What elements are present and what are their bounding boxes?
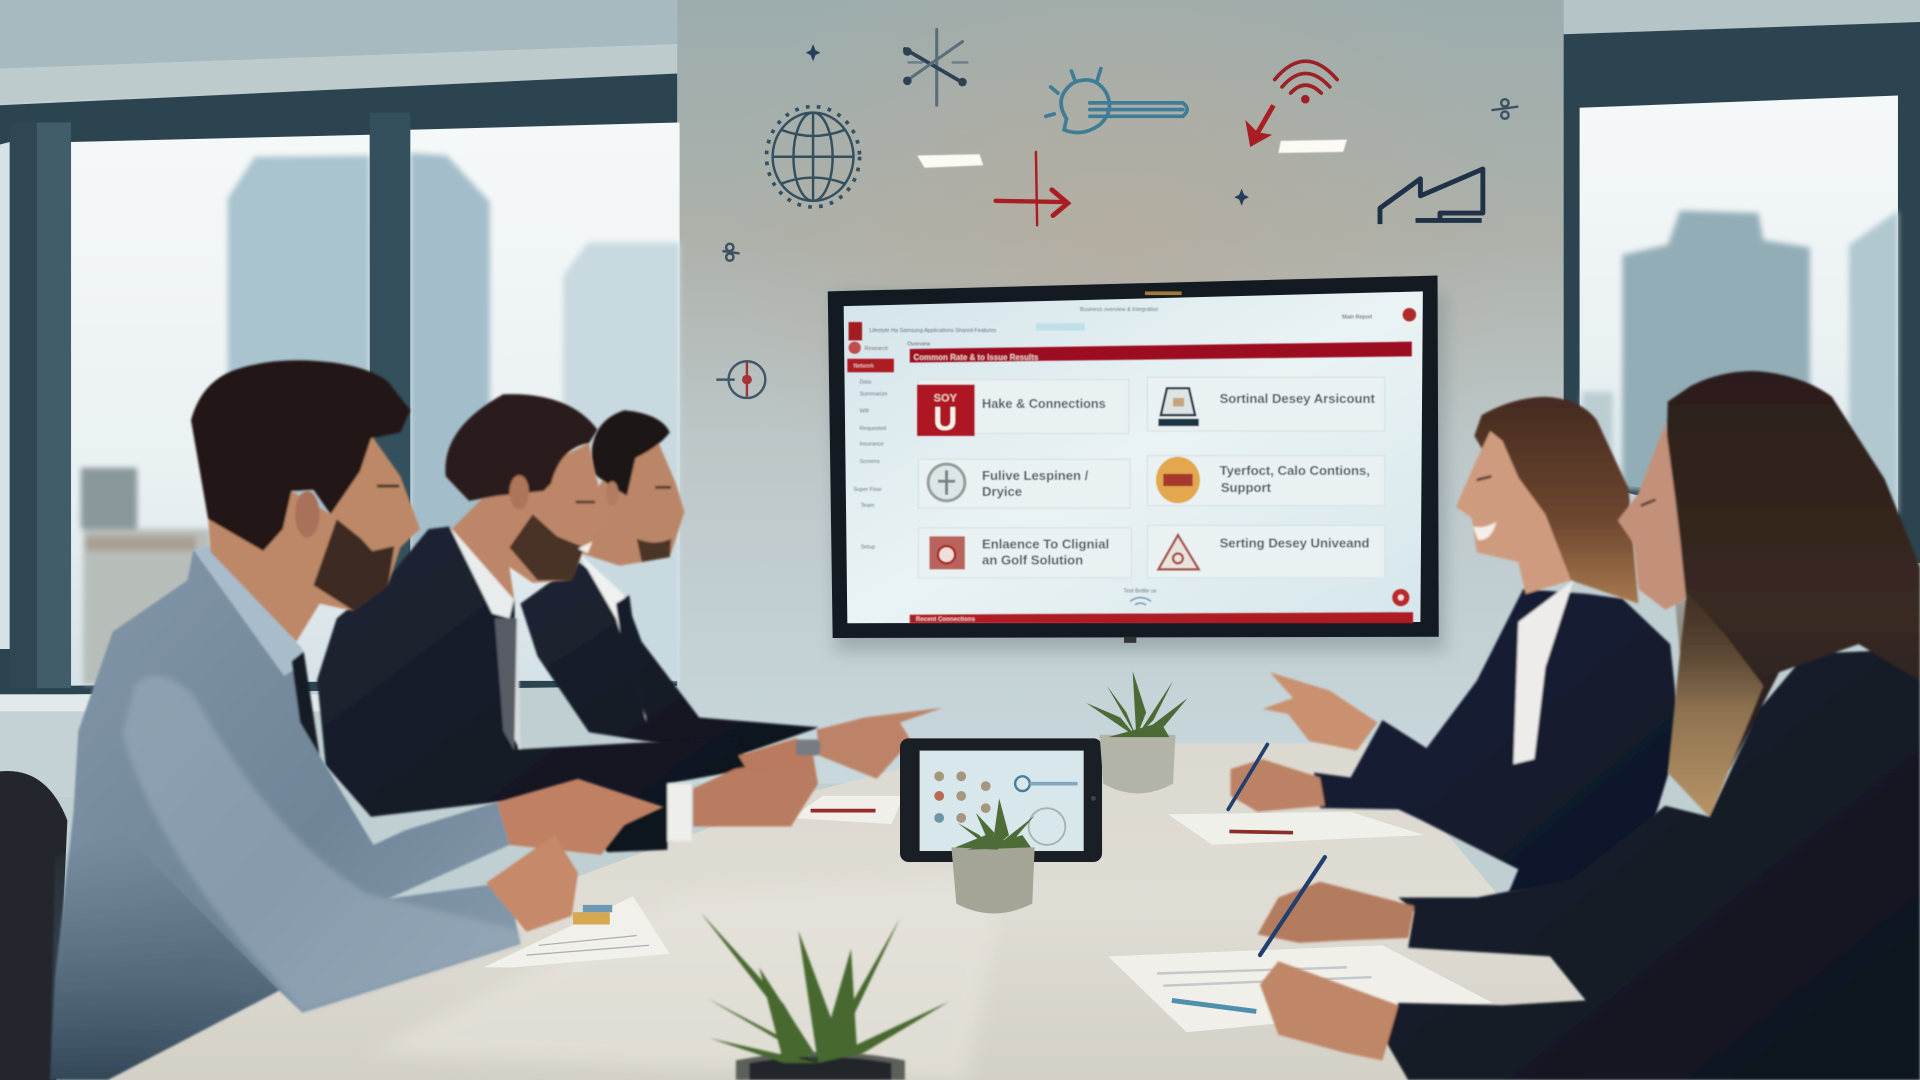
sidebar menu: Requested: [860, 426, 886, 432]
sidebar menu: Super Flow: [853, 487, 881, 493]
card: Hake & Connections: [917, 380, 1129, 438]
document: left report: [484, 896, 670, 967]
card: Hake & Connections: U: [933, 401, 957, 438]
plant: tablet-front succulent: [951, 798, 1035, 913]
icon: wall sparkles: [722, 44, 1518, 261]
person: man far back: [520, 410, 943, 779]
card: Enlaence To Clignial an Golf Solution: Enlaence To Clignial: [982, 537, 1109, 552]
icon: target: [716, 361, 765, 398]
top browser bar: Lifestyle Ha Samsung Applications Shared Features: [869, 328, 997, 334]
wall icons: [716, 29, 1518, 398]
sidebar menu: Network: [853, 363, 874, 369]
person: woman seated right: [1231, 397, 1680, 893]
document: center-left sheet with pen: [791, 796, 904, 824]
conference table: [86, 743, 1586, 1080]
top browser bar: Main Report: [1342, 314, 1372, 320]
plant: wall-side succulent: [1086, 671, 1188, 793]
card: Fulive Lespinen / Dryice: [918, 459, 1130, 508]
red header band: Common Rate & to Issue Results: [913, 353, 1039, 362]
person: man in front: [50, 360, 664, 1080]
card: Tyerfoct, Calo Contions, Support: [1147, 456, 1385, 506]
document: center-right sheet with pen: [1168, 812, 1424, 845]
sidebar menu: Setup: [861, 545, 875, 551]
person: woman in front right: [1258, 371, 1920, 1080]
display footer: [910, 589, 1413, 623]
card: Serting Desey Univeand: Serting Desey Univeand: [1220, 535, 1369, 550]
plant: foreground: [700, 912, 949, 1080]
sidebar menu: Data: [860, 379, 872, 385]
icon: crossed network sticks: [903, 29, 967, 105]
ceiling light reflections: [917, 140, 1347, 168]
left window with skyline: [0, 0, 680, 797]
sidebar menu: Summarize: [860, 392, 887, 398]
display footer: Recent Connections: [916, 616, 976, 623]
card: Hake & Connections: Hake & Connections: [982, 396, 1106, 411]
card: Fulive Lespinen / Dryice: Fulive Lespinen /: [982, 468, 1089, 483]
card: Enlaence To Clignial an Golf Solution: [918, 528, 1131, 578]
office chair: [0, 771, 67, 1080]
pens in hands: [1228, 744, 1325, 955]
red header band: [907, 341, 1412, 362]
top browser bar: [849, 307, 1416, 340]
document: front right sheet: [1108, 945, 1493, 1032]
card: Enlaence To Clignial an Golf Solution: an Golf Solution: [982, 552, 1083, 567]
red header band: Overview: [907, 341, 930, 347]
sidebar menu: [847, 342, 894, 551]
sidebar menu: Insurance: [860, 442, 884, 448]
icon: red crosshair arrow: [996, 152, 1068, 225]
sidebar menu: Wifi: [860, 409, 869, 415]
sidebar menu: Team: [861, 503, 875, 509]
right window with skyline: [1564, 0, 1920, 563]
card: Hake & Connections: SOY: [934, 393, 958, 405]
top browser bar: Business overview & Integration: [1080, 307, 1158, 313]
display footer: Test Bottle us: [1123, 589, 1157, 595]
card: Sortinal Desey Arsicount: [1147, 377, 1385, 431]
person: man in middle: [317, 394, 820, 852]
icon: factory outline: [1380, 169, 1483, 224]
feature cards: [917, 377, 1385, 578]
sidebar menu: Research: [864, 346, 888, 352]
card: Tyerfoct, Calo Contions, Support: Support: [1221, 480, 1272, 495]
icon: globe: [767, 107, 860, 207]
card: Tyerfoct, Calo Contions, Support: Tyerfoct, Calo Contions,: [1220, 463, 1370, 478]
documents on table: [484, 796, 1493, 1032]
icon: wifi signal: [1275, 61, 1337, 102]
sidebar menu: Screens: [860, 459, 880, 465]
icon: lightbulb speech bubble: [1046, 69, 1187, 133]
tablet: [900, 738, 1102, 862]
wall display: [828, 276, 1445, 651]
card: Serting Desey Univeand: [1147, 525, 1385, 578]
card: Sortinal Desey Arsicount: Sortinal Desey Arsicount: [1220, 391, 1375, 406]
card: Fulive Lespinen / Dryice: Dryice: [982, 484, 1022, 499]
icon: red down-left arrow: [1245, 105, 1273, 147]
